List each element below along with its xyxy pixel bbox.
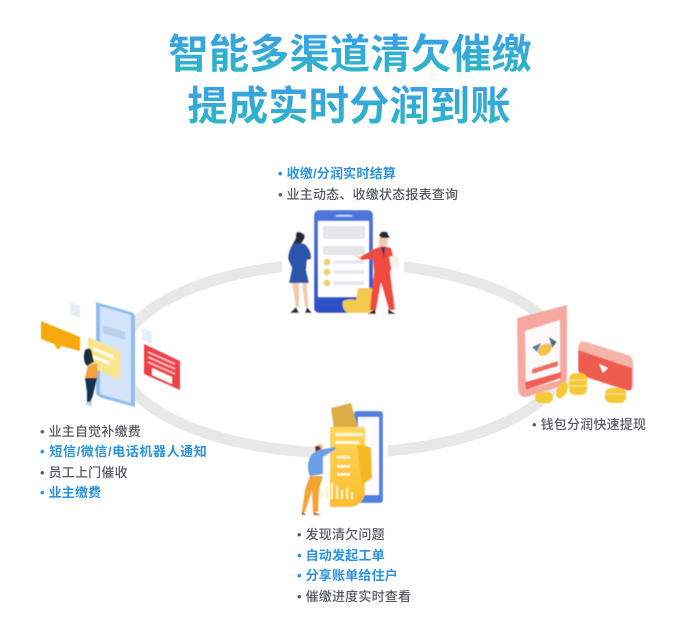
text block: reminder bullets: [40, 424, 207, 500]
text block: reminder bullets: • 短信/微信/电话机器人通知: [40, 444, 207, 459]
text block: reminder bullets: • 业主自觉补缴费: [40, 424, 141, 439]
panel: right withdrawal stage: [517, 305, 646, 432]
text block: reminder bullets: • 业主缴费: [40, 485, 101, 500]
text block: debt bullets: • 发现清欠问题: [297, 527, 385, 542]
panel: bottom debt stage: [297, 403, 411, 604]
illustration: phone with notification cards: [41, 302, 180, 407]
text block: settlement bullets: • 收缴/分润实时结算: [278, 166, 396, 181]
text block: settlement bullets: • 业主动态、收缴状态报表查询: [278, 187, 458, 202]
text block: settlement bullets: [278, 166, 458, 202]
title: 提成实时分润到账: [187, 83, 511, 129]
text block: debt bullets: • 催缴进度实时查看: [297, 589, 411, 604]
title: 智能多渠道清欠催缴: [168, 31, 532, 77]
text block: withdrawal bullet: • 钱包分润快速提现: [532, 417, 646, 432]
text block: debt bullets: • 自动发起工单: [297, 548, 385, 563]
panel: top settlement stage: [278, 166, 458, 320]
text block: reminder bullets: • 员工上门催收: [40, 465, 128, 480]
title: [168, 31, 532, 129]
panel: left collection stage: [40, 302, 207, 500]
text block: debt bullets: [297, 527, 411, 604]
illustration: tablet, wallet and coins: [517, 305, 633, 403]
illustration: receipt with person: [302, 403, 388, 515]
text block: debt bullets: • 分享账单给住户: [297, 568, 398, 583]
illustration: phone with two people: [282, 208, 404, 320]
ring connecting the four stages: [120, 263, 564, 453]
